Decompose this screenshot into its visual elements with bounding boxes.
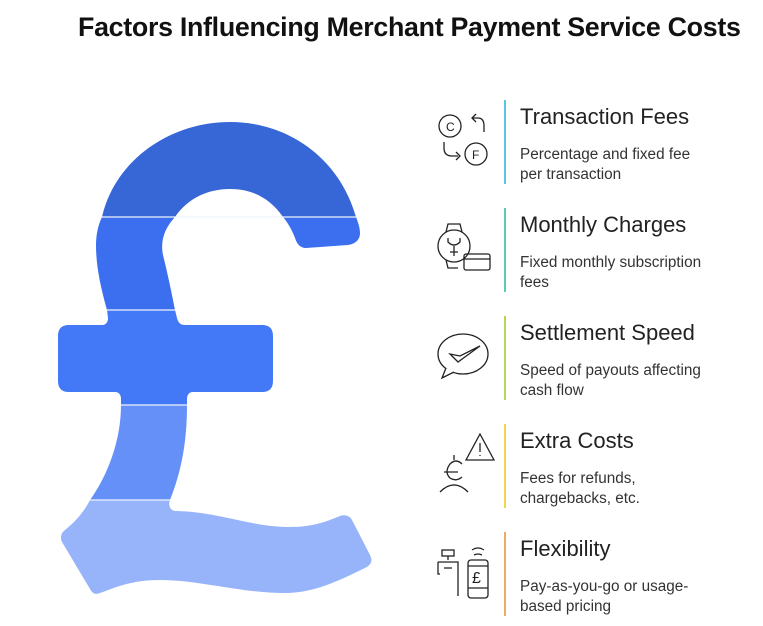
icon: currency exchange: F <box>472 148 479 162</box>
item: transaction fees: Percentage and fixed fee per transaction <box>520 146 690 183</box>
icon: scale and phone: £ <box>472 570 481 587</box>
item: flexibility <box>437 532 688 616</box>
item: settlement speed <box>437 316 701 400</box>
item: extra costs: Fees for refunds, chargebacks, etc. <box>520 470 640 507</box>
icon: chat check <box>437 333 489 380</box>
pound sign graphic <box>58 122 372 594</box>
item: monthly charges: Fixed monthly subscription fees <box>520 254 701 291</box>
item: transaction fees <box>438 100 690 184</box>
item: transaction fees: Transaction Fees <box>520 104 689 129</box>
item: flexibility: Pay-as-you-go or usage-based pricing <box>520 578 688 615</box>
item: monthly charges <box>437 208 701 292</box>
item: flexibility: Flexibility <box>520 536 610 561</box>
item: settlement speed: Settlement Speed <box>520 320 695 345</box>
item: extra costs <box>440 424 640 508</box>
icon: currency exchange <box>438 114 488 166</box>
icon: currency exchange: C <box>446 120 455 134</box>
item: monthly charges: Monthly Charges <box>520 212 686 237</box>
icon: person with warning <box>440 432 495 492</box>
item: settlement speed: Speed of payouts affecting cash flow <box>520 362 701 399</box>
icon: scale and phone <box>437 547 489 599</box>
icon: watch and card <box>437 223 491 271</box>
item: extra costs: Extra Costs <box>520 428 634 453</box>
title: Factors Influencing Merchant Payment Service Costs <box>78 12 741 42</box>
